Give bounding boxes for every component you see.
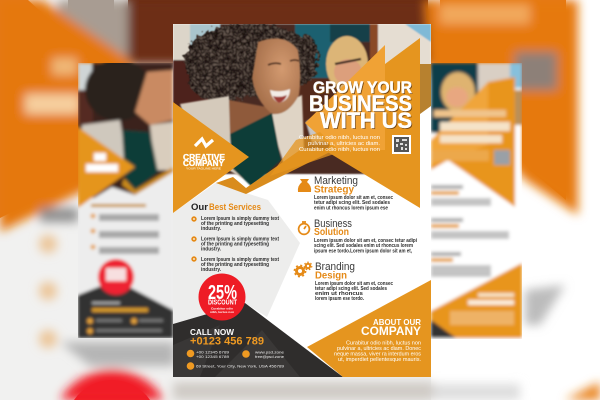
discount badge: Curabitur odio xyxy=(211,306,233,310)
business solution: Solution xyxy=(314,227,349,238)
left background flyer xyxy=(78,59,173,338)
services list: of the printing and typesetting xyxy=(201,242,269,248)
headline: BUSINESS xyxy=(309,91,412,116)
call now contacts: +0123 456 789 xyxy=(190,336,264,348)
services list: Best Services xyxy=(209,202,261,212)
business solution: Business xyxy=(314,218,352,230)
headline xyxy=(310,81,412,129)
logo: YOUR TAGLINE HERE xyxy=(186,166,221,170)
logo xyxy=(183,139,225,170)
headline body text: pulvinar a, ultricies ac diam. xyxy=(308,141,380,147)
discount badge: DISCOUNT xyxy=(208,300,238,306)
discount badge xyxy=(198,274,246,320)
icon: bullet 1 xyxy=(192,217,196,221)
gray services panel xyxy=(173,182,300,324)
headline: WITH US xyxy=(320,108,412,133)
services list: of the printing and typesetting xyxy=(201,262,269,268)
marketing strategy xyxy=(298,175,393,212)
branding design: Branding xyxy=(315,261,355,273)
call now contacts: CALL NOW xyxy=(190,327,235,337)
services list: industry. xyxy=(201,246,222,252)
branding design xyxy=(294,261,393,302)
call now contacts: 69 Street, Your City, New York, USA 456789 xyxy=(196,364,285,368)
services list: of the printing and typesetting xyxy=(201,221,269,227)
discount badge: nibh, luctus non xyxy=(210,310,234,314)
marketing strategy: enim ut rhoncus lorem ipsum ese xyxy=(314,206,388,212)
headline: GROW YOUR xyxy=(313,78,412,97)
headline: GROW YOUR xyxy=(314,79,413,98)
icon: stopwatch xyxy=(299,222,309,234)
about our company panel: pulvinar a, ultricies ac diam. Donec xyxy=(337,346,422,352)
services list: industry. xyxy=(201,226,222,232)
services list: industry. xyxy=(201,267,222,273)
icon: bullet 3 xyxy=(192,257,196,261)
headline: BUSINESS xyxy=(310,92,413,117)
orange headline shape xyxy=(216,38,431,208)
icon: web xyxy=(242,350,250,358)
icon: logo mark xyxy=(195,139,213,146)
services list: Lorem Ipsum is simply dummy text xyxy=(201,257,279,263)
marketing strategy: Strategy xyxy=(314,184,354,196)
business solution xyxy=(299,218,418,254)
logo: CREATIVE xyxy=(183,153,225,162)
about our company panel: neque massa, viver ra interdum eros xyxy=(334,352,422,358)
about our company panel xyxy=(307,280,431,377)
discount badge: 25% xyxy=(208,282,237,304)
branding design: Lorem ipsum dolor sit am et, consec xyxy=(315,281,393,287)
about our company panel: Curabitur odio nibh, luctus non xyxy=(346,340,421,346)
dark contact panel xyxy=(173,303,343,377)
about our company panel: COMPANY xyxy=(361,326,421,338)
headline body text: Curabitur odio nibh, luctus non xyxy=(299,147,380,153)
icon: bullet 2 xyxy=(192,237,196,241)
icon: phone xyxy=(187,350,194,357)
icon: location xyxy=(187,362,194,370)
photo: laughing woman xyxy=(173,23,431,187)
business solution: scing elit. Sed sodales enim ut rhoncus lorem xyxy=(314,243,413,249)
about our company panel: ut, imperdiet pellentesque mauris. xyxy=(338,357,421,363)
call now contacts xyxy=(187,327,285,370)
branding design: lorem ipsum ese tordo. xyxy=(315,296,365,302)
marketing strategy: Marketing xyxy=(314,175,358,187)
services list xyxy=(191,202,279,273)
headline body text: Curabitur odio nibh, luctus non xyxy=(299,135,380,141)
right background flyer xyxy=(431,63,522,339)
marketing strategy: tetur adipi scing elit. Sed sodales xyxy=(314,200,390,206)
icon: gears xyxy=(294,262,312,277)
headline body text xyxy=(299,135,380,153)
branding design: tetur adipi scing elit. Sed sodales xyxy=(315,286,387,292)
logo: COMPANY xyxy=(183,159,225,168)
QR code xyxy=(392,135,411,154)
orange logo triangle xyxy=(173,102,249,213)
call now contacts: free@psd.zone xyxy=(255,354,285,359)
branding design: enim ut rhoncus xyxy=(315,291,363,297)
business solution: Lorem ipsum dolor sit am et, consec tetur adipi xyxy=(314,238,418,244)
headline: WITH US xyxy=(321,109,413,134)
main flyer xyxy=(173,23,431,377)
business solution: ipsum ese tordo.Lorem ipsum dolor sit am et, xyxy=(314,248,413,254)
marketing strategy: Lorem ipsum dolor sit am et, consec xyxy=(314,195,393,201)
services list: Lorem Ipsum is simply dummy text xyxy=(201,236,279,242)
icon: money bag xyxy=(298,179,311,192)
branding design: Design xyxy=(315,270,347,282)
call now contacts: www.psd.zone xyxy=(255,350,285,354)
services list: Our xyxy=(191,202,209,212)
about our company panel: ABOUT OUR xyxy=(373,317,421,327)
call now contacts: +00 12345 6789 xyxy=(196,354,230,359)
call now contacts: +00 12345 6789 xyxy=(196,350,230,354)
services list: Lorem Ipsum is simply dummy text xyxy=(201,216,279,222)
